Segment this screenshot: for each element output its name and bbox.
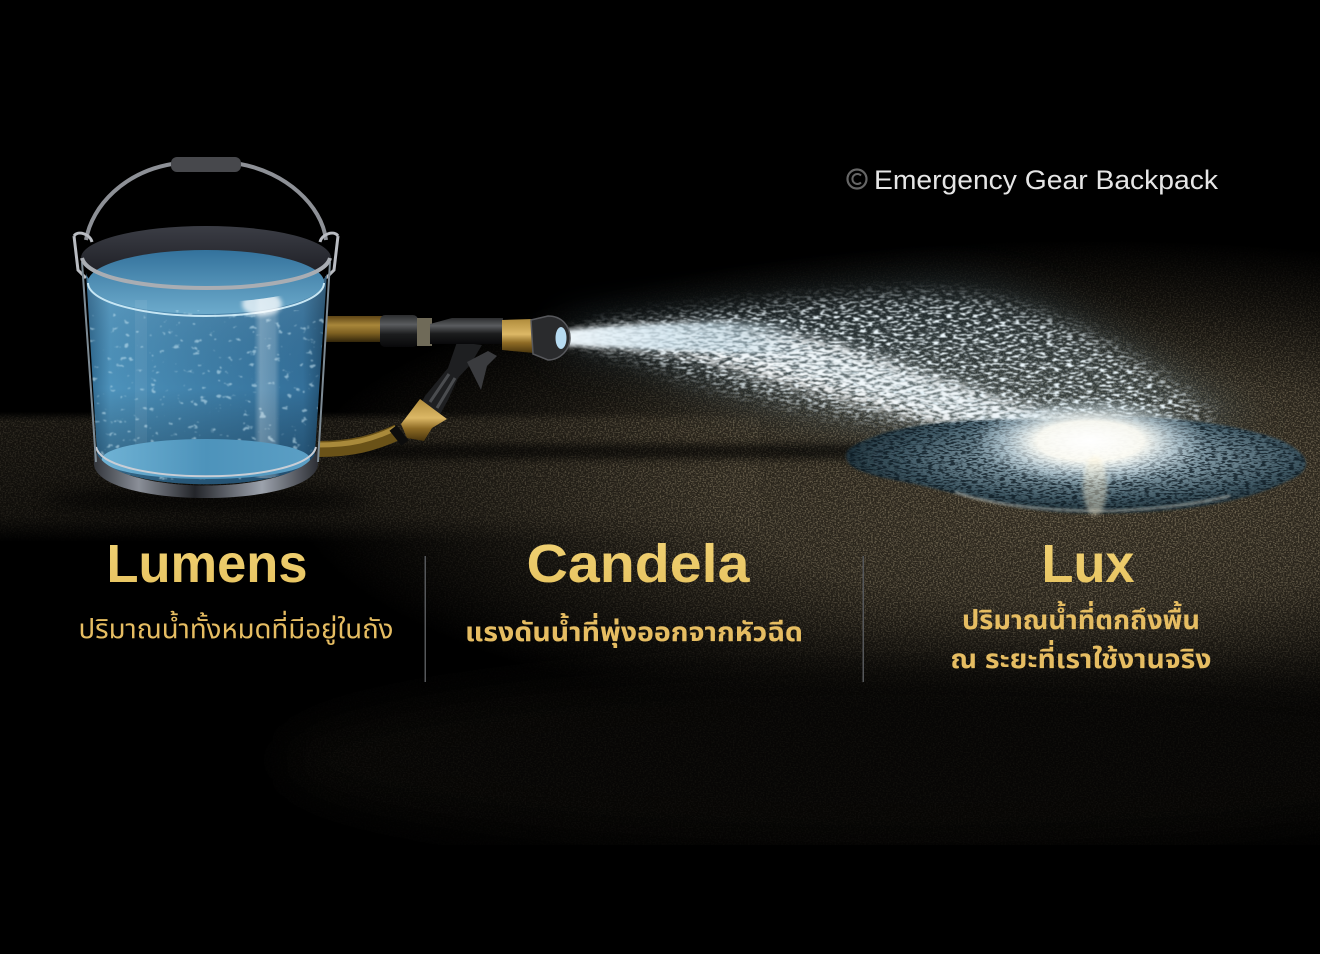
icon: spray of water (556, 285, 1260, 446)
infographic: lumens candela lux water analogy (0, 157, 1320, 843)
bucket base ring (94, 445, 318, 498)
copyright watermark (848, 165, 1219, 195)
icon: water bucket (74, 157, 338, 498)
spray droplets (590, 296, 1220, 438)
brass sleeve (502, 319, 534, 353)
heading: candela: Candela (526, 534, 751, 594)
heading: lumens: Lumens (106, 534, 308, 594)
heading: lux: Lux (1042, 534, 1134, 594)
dense spray core (570, 325, 1110, 446)
trigger (467, 351, 497, 390)
water body (86, 272, 327, 484)
icon: spray nozzle gun (380, 315, 570, 443)
panel: candela (465, 534, 803, 648)
panel: lux (950, 534, 1212, 674)
handle lugs (74, 233, 338, 278)
copyright icon (848, 170, 866, 188)
hose coupling (380, 315, 418, 347)
text: lux description line two: ณ ระยะที่เราใช้งานจริง (950, 640, 1212, 674)
gun grip (420, 342, 482, 418)
nozzle ring (531, 316, 570, 360)
icon: puddle of light on ground (846, 397, 1306, 516)
spray glow (560, 285, 1260, 445)
icon: lower hose (318, 428, 398, 449)
ground shadows (45, 444, 860, 511)
bucket walls (82, 262, 330, 462)
jet at nozzle (556, 322, 800, 354)
text: candela description: แรงดันน้ำที่พุ่งออกจากหัวฉีด (465, 613, 803, 648)
bubbles in water (90, 288, 326, 480)
icon: upper hose (326, 316, 384, 342)
bucket base water (102, 439, 310, 479)
bucket handle (86, 164, 326, 240)
divider two (862, 556, 864, 682)
panel: lumens (78, 534, 394, 645)
water surface (88, 250, 324, 314)
text: lux description line one: ปริมาณน้ำที่ตกถึงพื้น (962, 601, 1200, 635)
bucket back rim (81, 226, 331, 290)
handle grip (171, 157, 241, 172)
ground surface (0, 200, 1320, 845)
vertical light band (255, 296, 279, 478)
text: lumens description: ปริมาณน้ำทั้งหมดที่มีอยู่ในถัง (78, 610, 394, 645)
watermark text: Emergency Gear Backpack (874, 165, 1219, 195)
brass connector (401, 399, 447, 441)
gun barrel (430, 318, 503, 344)
divider one (424, 556, 426, 682)
bucket front rim (82, 258, 330, 288)
